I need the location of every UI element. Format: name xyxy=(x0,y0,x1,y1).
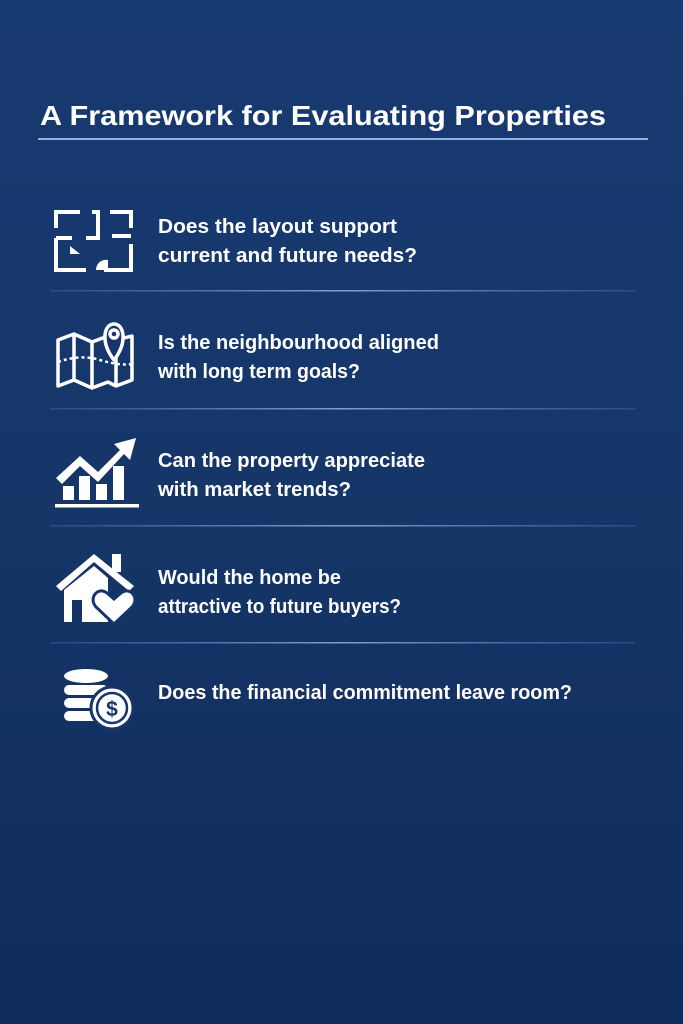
item: layout xyxy=(56,212,417,270)
text: with long term goals? xyxy=(157,361,360,383)
icon: coins dollar xyxy=(64,669,133,729)
title: A Framework for Evaluating Properties xyxy=(40,100,606,131)
text: with market trends? xyxy=(157,479,351,501)
text: Does the layout support xyxy=(158,216,397,238)
item: market trends xyxy=(55,438,425,508)
item: financial xyxy=(64,669,572,729)
icon: coins dollar: $ xyxy=(106,698,118,721)
text: Can the property appreciate xyxy=(158,450,425,472)
icon: house heart xyxy=(56,554,135,624)
icon: floor plan xyxy=(56,212,131,270)
text: Does the financial commitment leave room? xyxy=(158,682,572,704)
item: neighbourhood xyxy=(58,324,439,388)
text: attractive to future buyers? xyxy=(158,596,401,618)
text: current and future needs? xyxy=(158,245,417,267)
icon: chart arrow xyxy=(55,438,139,508)
text: Would the home be xyxy=(158,567,341,589)
icon: map pin xyxy=(58,324,132,388)
text: Is the neighbourhood aligned xyxy=(158,332,439,354)
item: future buyers xyxy=(56,554,401,624)
